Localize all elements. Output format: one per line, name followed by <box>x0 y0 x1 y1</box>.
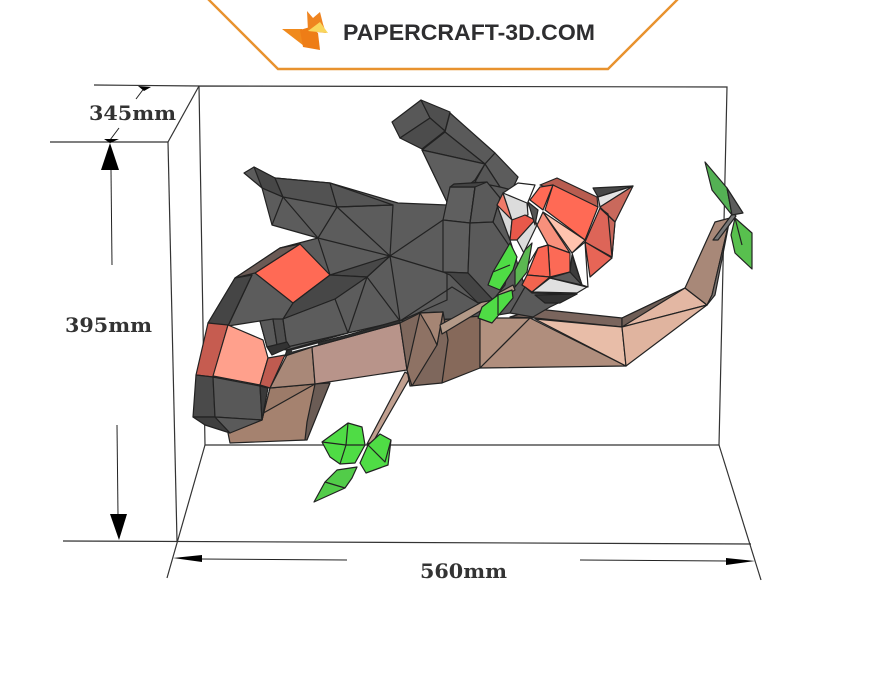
salmon back patch <box>255 244 330 303</box>
raccoon head <box>497 178 633 317</box>
dimension: height 395mm: 395mm <box>65 313 152 337</box>
tip twig <box>713 213 736 240</box>
gray backing behind arm and chest <box>400 205 525 321</box>
branch and tail underside <box>228 213 736 444</box>
hind paw <box>260 299 400 356</box>
leaves at branch tip <box>705 162 752 269</box>
dimension: height 395mm <box>65 143 152 540</box>
dimension: width 560mm <box>173 555 755 583</box>
lower twig <box>367 372 411 444</box>
leaves at lower twig <box>314 423 391 502</box>
front arm <box>443 182 512 303</box>
pale muzzle bands <box>537 212 570 253</box>
raised front leg <box>392 100 518 202</box>
site name: PAPERCRAFT-3D.COM <box>343 20 595 45</box>
left face <box>503 183 535 220</box>
right cheek <box>585 208 615 257</box>
dimension: depth 345mm: 345mm <box>89 101 176 125</box>
crown <box>540 178 598 207</box>
header banner <box>208 0 678 69</box>
banner outline <box>208 0 678 69</box>
small upper twig <box>440 285 515 334</box>
dimension box wireframe <box>50 85 761 580</box>
icon: origami fox logo <box>282 11 328 50</box>
branch knot <box>400 312 448 386</box>
raccoon body <box>208 167 478 350</box>
ear <box>593 186 633 197</box>
muzzle <box>548 245 570 277</box>
leaves near head <box>478 243 532 323</box>
tail bands <box>193 323 285 433</box>
raccoon papercraft model <box>193 100 752 502</box>
dimension: width 560mm: 560mm <box>420 559 507 583</box>
chin shadow <box>510 287 577 317</box>
dimension: depth 345mm <box>89 86 176 143</box>
